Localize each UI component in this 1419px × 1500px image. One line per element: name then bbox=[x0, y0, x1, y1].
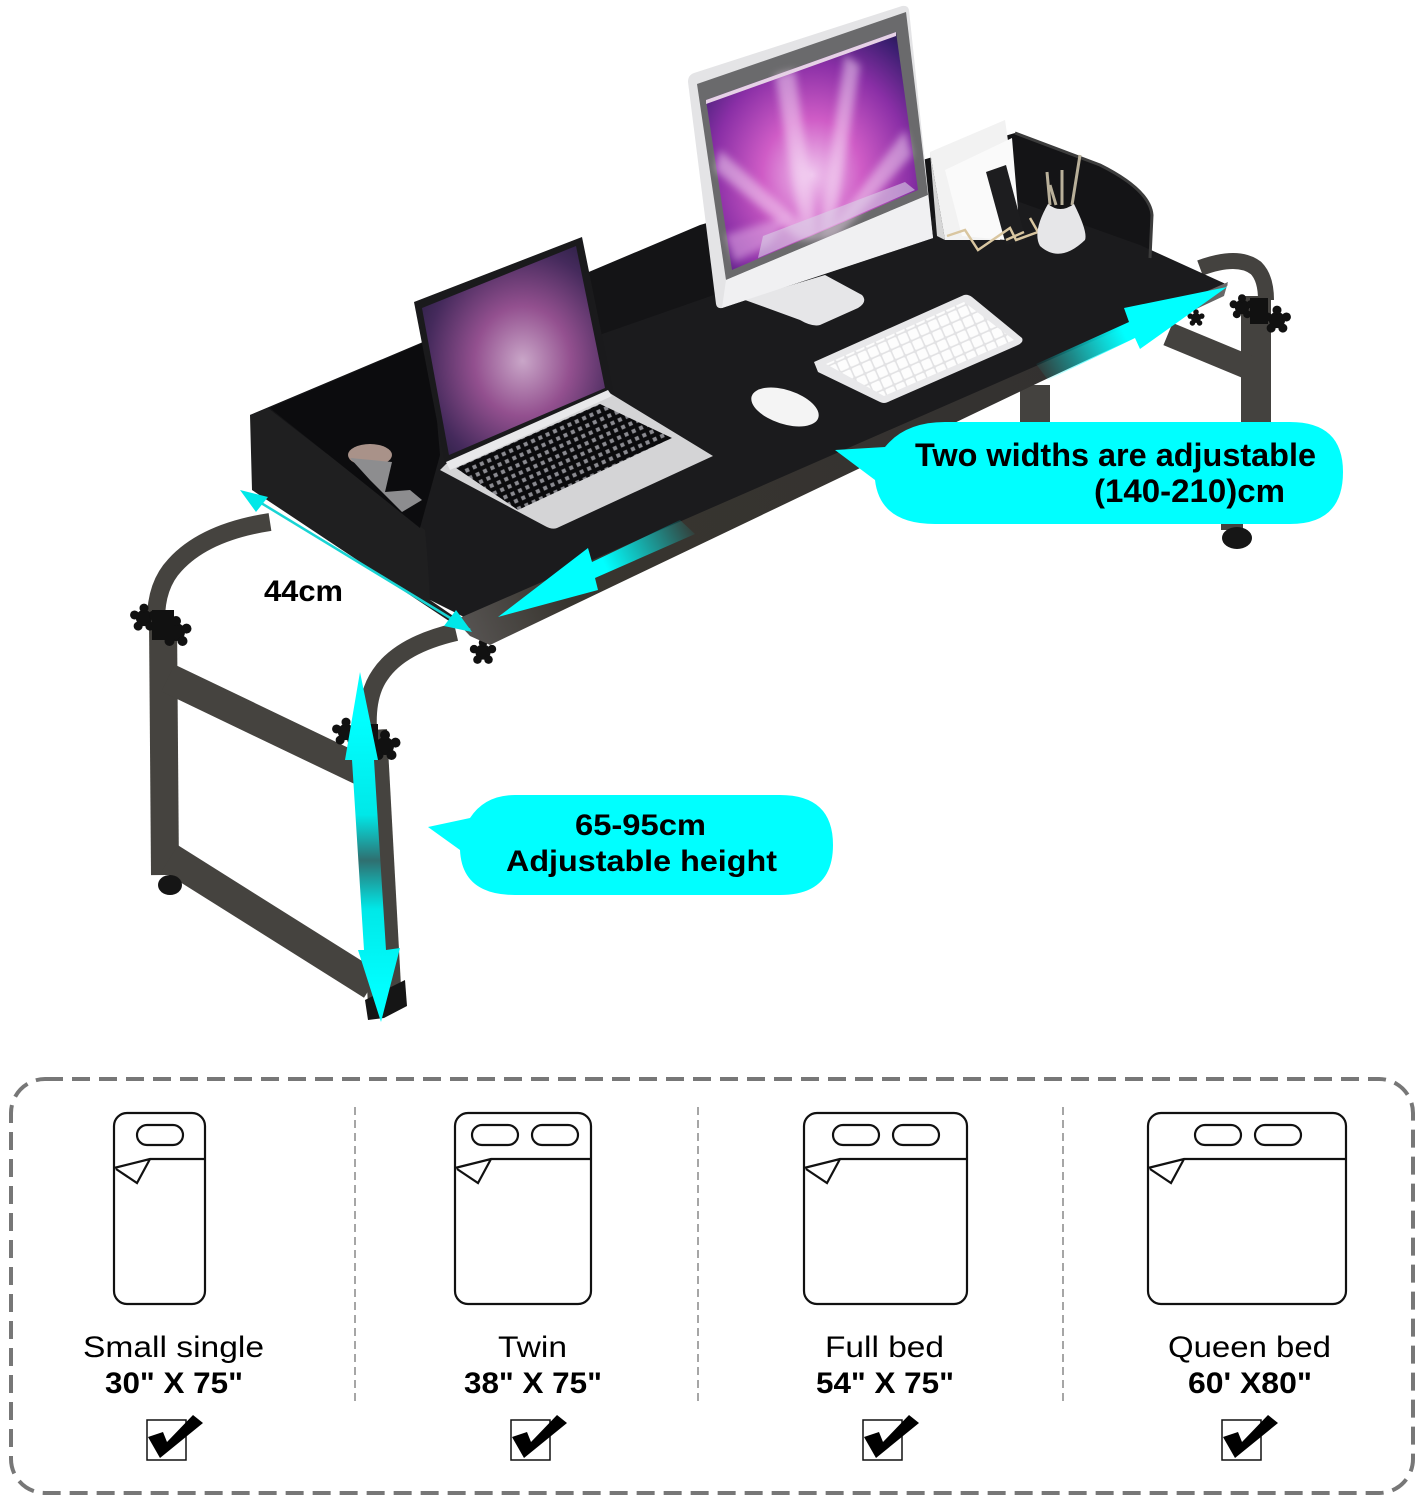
check: full bbox=[863, 1415, 919, 1460]
right leg frame bbox=[1035, 261, 1266, 530]
text: small single bbox=[83, 1331, 264, 1400]
text: queen bbox=[1168, 1331, 1331, 1400]
cup bbox=[348, 444, 422, 512]
callout: height: 65-95cm bbox=[575, 809, 706, 842]
text: full bbox=[816, 1331, 954, 1400]
mouse bbox=[746, 380, 824, 434]
text: queen: Queen bed bbox=[1168, 1331, 1331, 1364]
right knobs bbox=[1187, 294, 1291, 333]
callout: height: Adjustable height bbox=[506, 845, 777, 878]
left wheels bbox=[158, 875, 407, 1020]
callout: widths: (140-210)cm bbox=[1094, 473, 1285, 509]
check: small single bbox=[147, 1415, 203, 1460]
bed: queen bbox=[1148, 1113, 1346, 1304]
text: full: Full bed bbox=[825, 1331, 944, 1364]
right wheel bbox=[1222, 527, 1252, 549]
keyboard bbox=[814, 295, 1022, 403]
text: queen: 60' X80" bbox=[1188, 1367, 1312, 1400]
arrow: height bbox=[345, 672, 400, 1022]
phone on gold stand bbox=[947, 165, 1038, 250]
bed: full bbox=[804, 1113, 967, 1304]
monitor stand bbox=[745, 275, 864, 325]
inner compartment bbox=[270, 340, 440, 528]
left leg frame bbox=[156, 522, 456, 1005]
text: twin: Twin bbox=[498, 1331, 567, 1364]
laptop bbox=[414, 237, 713, 529]
text: twin: 38" X 75" bbox=[464, 1367, 602, 1400]
desk back rail bbox=[250, 133, 1152, 610]
check: twin bbox=[511, 1415, 567, 1460]
arrow: left width bbox=[498, 520, 695, 617]
text: small single: Small single bbox=[83, 1331, 264, 1364]
arrow: depth 44cm bbox=[240, 490, 472, 632]
arrow: right width bbox=[1036, 287, 1227, 380]
callout: height bbox=[428, 795, 833, 895]
text: twin bbox=[464, 1331, 602, 1400]
bed: small single bbox=[114, 1113, 205, 1304]
check: queen bbox=[1222, 1415, 1278, 1460]
text: small single: 30" X 75" bbox=[105, 1367, 243, 1400]
dashed frame bbox=[11, 1079, 1413, 1493]
desk illustration bbox=[130, 6, 1291, 1020]
text: full: 54" X 75" bbox=[816, 1367, 954, 1400]
monitor bbox=[688, 6, 933, 308]
left side panel bbox=[250, 408, 462, 625]
tabletop bbox=[300, 195, 1228, 625]
left knobs bbox=[130, 604, 496, 760]
right panel edge bbox=[1015, 133, 1152, 258]
bed: twin bbox=[455, 1113, 591, 1304]
front lip bbox=[455, 282, 1228, 645]
label: 44cm: 44cm bbox=[264, 575, 343, 608]
callout: widths bbox=[835, 422, 1343, 524]
callout: widths: Two widths are adjustable bbox=[915, 437, 1316, 473]
pen pot bbox=[1037, 155, 1086, 254]
books bbox=[930, 120, 1018, 240]
panel: bed sizes bbox=[11, 1079, 1413, 1493]
